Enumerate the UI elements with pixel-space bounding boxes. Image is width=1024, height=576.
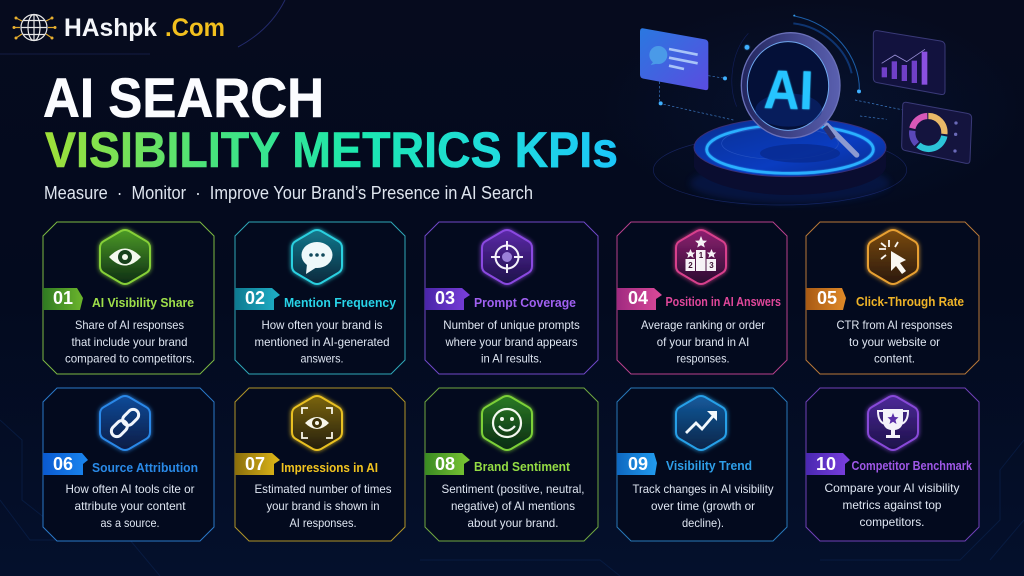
description: your brand is shown in	[266, 499, 380, 513]
icon: podium: 1	[699, 251, 704, 260]
magnifier handle	[825, 125, 857, 155]
badge: 08	[425, 453, 470, 475]
description	[836, 318, 952, 366]
icon: trend arrow	[676, 396, 726, 450]
badge: 01: 01	[53, 288, 73, 308]
description	[66, 482, 195, 530]
metric title: Click-Through Rate	[856, 294, 964, 309]
badge: 03: 03	[435, 288, 455, 308]
description	[254, 482, 392, 530]
description: How often AI tools cite or	[66, 482, 195, 496]
badge: 05	[806, 288, 846, 310]
description: Number of unique prompts	[443, 318, 580, 332]
badge: 05: 05	[817, 288, 837, 308]
magnifier lens	[741, 33, 840, 138]
metric title: Source Attribution	[92, 460, 198, 475]
icon: eye in frame	[292, 396, 342, 450]
badge: 02	[235, 288, 280, 310]
metric title: Position in AI Answers	[666, 294, 781, 309]
icon: podium	[676, 230, 726, 284]
icon: chat bubble	[292, 230, 342, 284]
title line 2: VISIBILITY METRICS KPIs	[45, 122, 618, 178]
description: attribute your content	[74, 499, 186, 513]
description: Compare your AI visibility	[824, 481, 960, 495]
title	[43, 66, 618, 178]
floating card: donut chart	[902, 102, 972, 163]
description: responses.	[676, 352, 730, 366]
floating card: message	[640, 28, 708, 90]
description: Sentiment (positive, neutral,	[442, 482, 584, 496]
description: compared to competitors.	[65, 352, 195, 366]
metric title: Impressions in AI	[281, 460, 378, 475]
logo text: HAshpk	[64, 14, 157, 42]
description: decline).	[682, 516, 724, 530]
description	[824, 481, 960, 529]
description	[442, 482, 584, 530]
panel: 09 Visibility Trend	[617, 388, 787, 541]
description: where your brand appears	[445, 335, 578, 349]
description	[641, 318, 765, 366]
description: competitors.	[860, 515, 924, 529]
description: How often your brand is	[262, 318, 382, 332]
icon: cursor click	[868, 230, 918, 284]
logo: HAshpk .Com	[12, 14, 225, 42]
description: CTR from AI responses	[836, 318, 952, 332]
description: content.	[874, 352, 915, 366]
panel: 04 Position in AI Answers	[617, 222, 787, 374]
description	[443, 318, 580, 366]
title line 1: AI SEARCH	[43, 66, 324, 129]
badge: 06: 06	[53, 454, 73, 474]
description: Track changes in AI visibility	[632, 482, 774, 496]
description: about your brand.	[468, 516, 558, 530]
description: in AI results.	[481, 352, 542, 366]
metric title: AI Visibility Share	[92, 295, 194, 310]
hero illustration: AI magnifier on platform	[640, 15, 972, 205]
badge: 02: 02	[245, 288, 265, 308]
badge: 09: 09	[628, 454, 648, 474]
description	[632, 482, 774, 530]
icon: eye	[100, 230, 150, 284]
badge: 04: 04	[628, 288, 648, 308]
badge: 07	[235, 453, 280, 475]
icon: podium: 3	[709, 261, 714, 270]
orbit arcs	[732, 16, 859, 107]
description: Average ranking or order	[641, 318, 765, 332]
description: as a source.	[100, 516, 160, 530]
badge: 10	[806, 453, 850, 475]
floating card: bar chart	[873, 31, 945, 95]
metric title: Mention Frequency	[284, 295, 397, 310]
description: answers.	[300, 352, 344, 366]
subtitle: Measure · Monitor · Improve Your Brand’s Presence in AI Search	[44, 183, 533, 203]
logo text	[64, 14, 225, 42]
icon: podium: 2	[688, 261, 693, 270]
description: of your brand in AI	[657, 335, 749, 349]
metric title: Prompt Coverage	[474, 295, 576, 310]
badge: 08: 08	[435, 454, 455, 474]
badge: 09	[617, 453, 657, 475]
icon: globe	[12, 14, 56, 40]
description: metrics against top	[842, 498, 942, 512]
badge: 06	[43, 453, 88, 475]
logo text: .Com	[165, 14, 225, 42]
description: Share of AI responses	[75, 318, 184, 332]
description: over time (growth or	[651, 499, 755, 513]
metric title: Competitor Benchmark	[852, 458, 973, 473]
badge: 01	[43, 288, 83, 310]
description	[65, 318, 195, 366]
panel: 06 Source Attribution	[43, 388, 214, 541]
panel: 02 Mention Frequency	[235, 222, 405, 374]
icon: trophy	[868, 396, 918, 450]
icon: target	[482, 230, 532, 284]
dashed connectors	[659, 76, 903, 120]
metric title: Brand Sentiment	[474, 459, 571, 474]
icon: smiley	[482, 396, 532, 450]
description	[254, 318, 390, 366]
badge: 04	[617, 288, 662, 310]
description: Estimated number of times	[254, 482, 392, 496]
lens text: AI	[763, 58, 814, 121]
description: that include your brand	[72, 335, 188, 349]
icon: chain link	[100, 396, 150, 450]
description: to your website or	[849, 335, 940, 349]
panel: 10 Competitor Benchmark	[806, 388, 979, 541]
metric title: Visibility Trend	[666, 458, 752, 473]
panel: 08 Brand Sentiment	[425, 388, 598, 541]
panel: 01 AI Visibility Share	[43, 222, 214, 374]
description: negative) of AI mentions	[451, 499, 575, 513]
badge: 03	[425, 288, 470, 310]
platform	[694, 118, 886, 195]
description: AI responses.	[290, 516, 356, 530]
badge: 07: 07	[245, 454, 265, 474]
description: mentioned in AI-generated	[254, 335, 390, 349]
panel: 05 Click-Through Rate	[806, 222, 979, 374]
panel: 07 Impressions in AI	[235, 388, 405, 541]
panel: 03 Prompt Coverage	[425, 222, 598, 374]
badge: 10: 10	[816, 454, 836, 474]
